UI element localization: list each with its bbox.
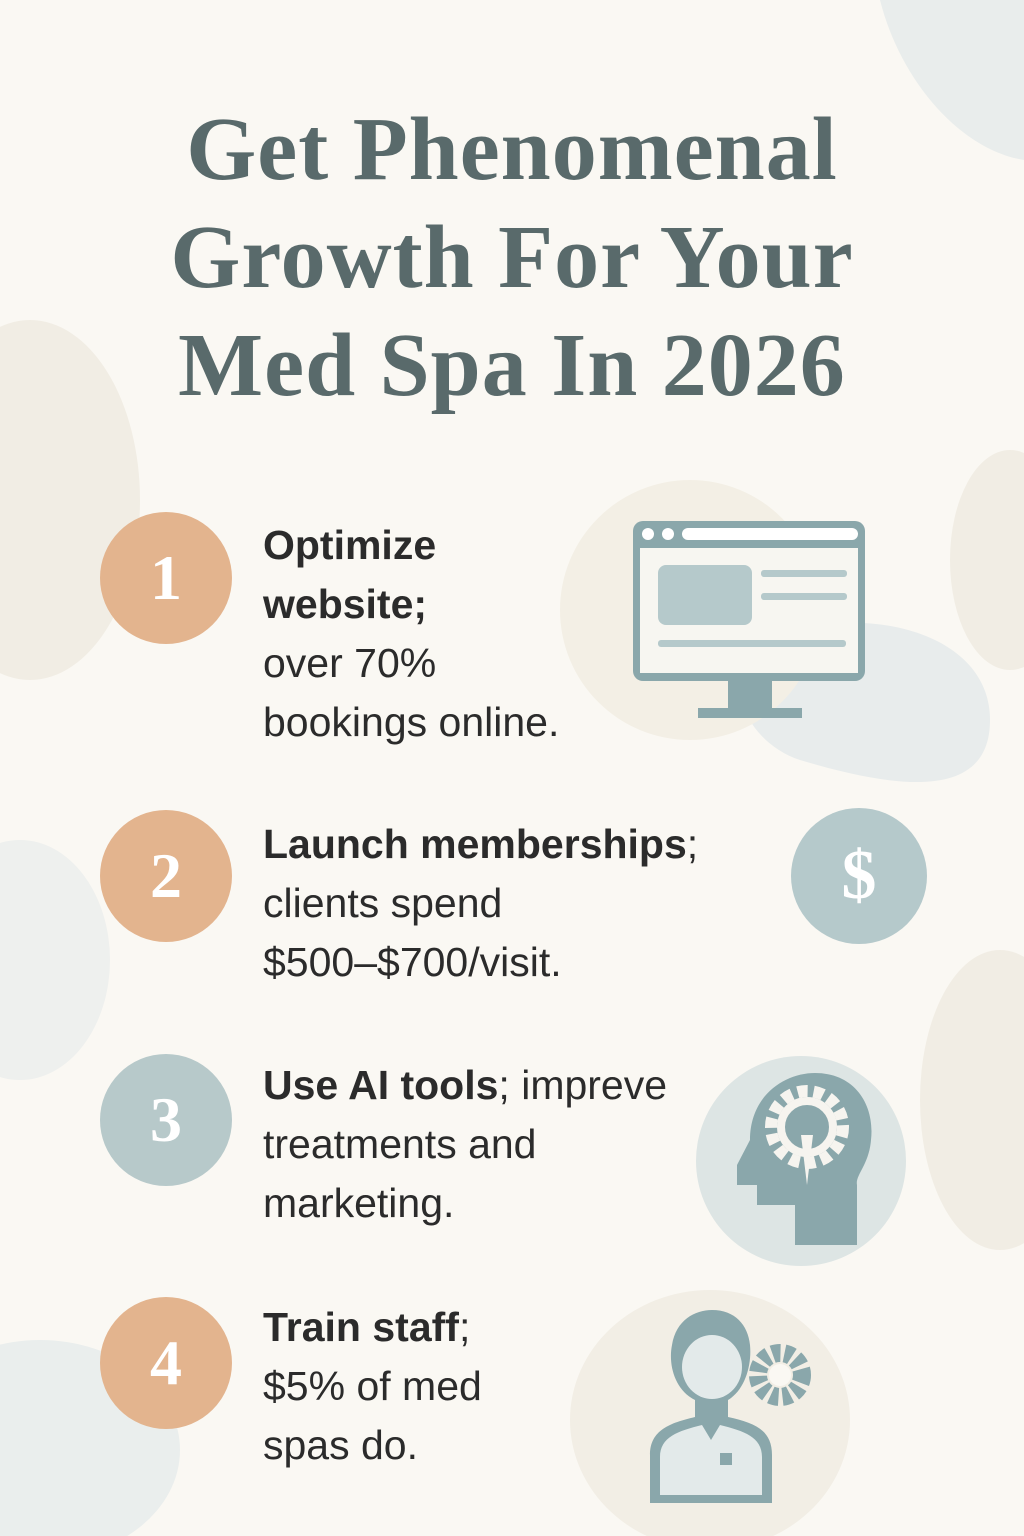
step 2 text: Launch memberships; <box>263 821 698 867</box>
icon: dollar: $ <box>842 837 876 914</box>
step 4 text: $5% of med <box>263 1363 482 1409</box>
step 1 number: 1 <box>150 542 182 613</box>
step 2 number <box>100 810 232 942</box>
step 1 text: Optimize <box>263 522 436 568</box>
step 3 number <box>100 1054 232 1186</box>
step 1 text: bookings online. <box>263 699 559 745</box>
step 4 number <box>100 1297 232 1429</box>
step 3 text: treatments and <box>263 1121 536 1167</box>
step 1 text <box>262 522 559 745</box>
step 3 text: marketing. <box>263 1180 454 1226</box>
icon: person with gear <box>650 1310 811 1503</box>
step 2 number: 2 <box>150 840 182 911</box>
step 1 text: over 70% <box>263 640 436 686</box>
step 3 number: 3 <box>150 1084 182 1155</box>
step 3 text: Use AI tools; impreve <box>263 1062 667 1108</box>
icon: head with gear <box>696 1056 906 1266</box>
step 4 text: spas do. <box>263 1422 418 1468</box>
title: Get Phenomenal <box>186 100 838 199</box>
step 1 number <box>100 512 232 644</box>
title <box>170 100 854 415</box>
icon: monitor <box>633 521 865 718</box>
step 4 number: 4 <box>150 1327 182 1398</box>
step 4 text <box>263 1304 482 1468</box>
icon: dollar <box>791 808 927 944</box>
step 2 text <box>263 821 698 985</box>
step 1 text: website; <box>263 581 427 627</box>
step 2 text: clients spend <box>263 880 502 926</box>
title: Growth For Your <box>170 208 854 307</box>
title: Med Spa In 2026 <box>178 316 846 415</box>
step 2 text: $500–$700/visit. <box>263 939 562 985</box>
step 3 text <box>263 1062 667 1226</box>
step 4 text: Train staff; <box>263 1304 470 1350</box>
